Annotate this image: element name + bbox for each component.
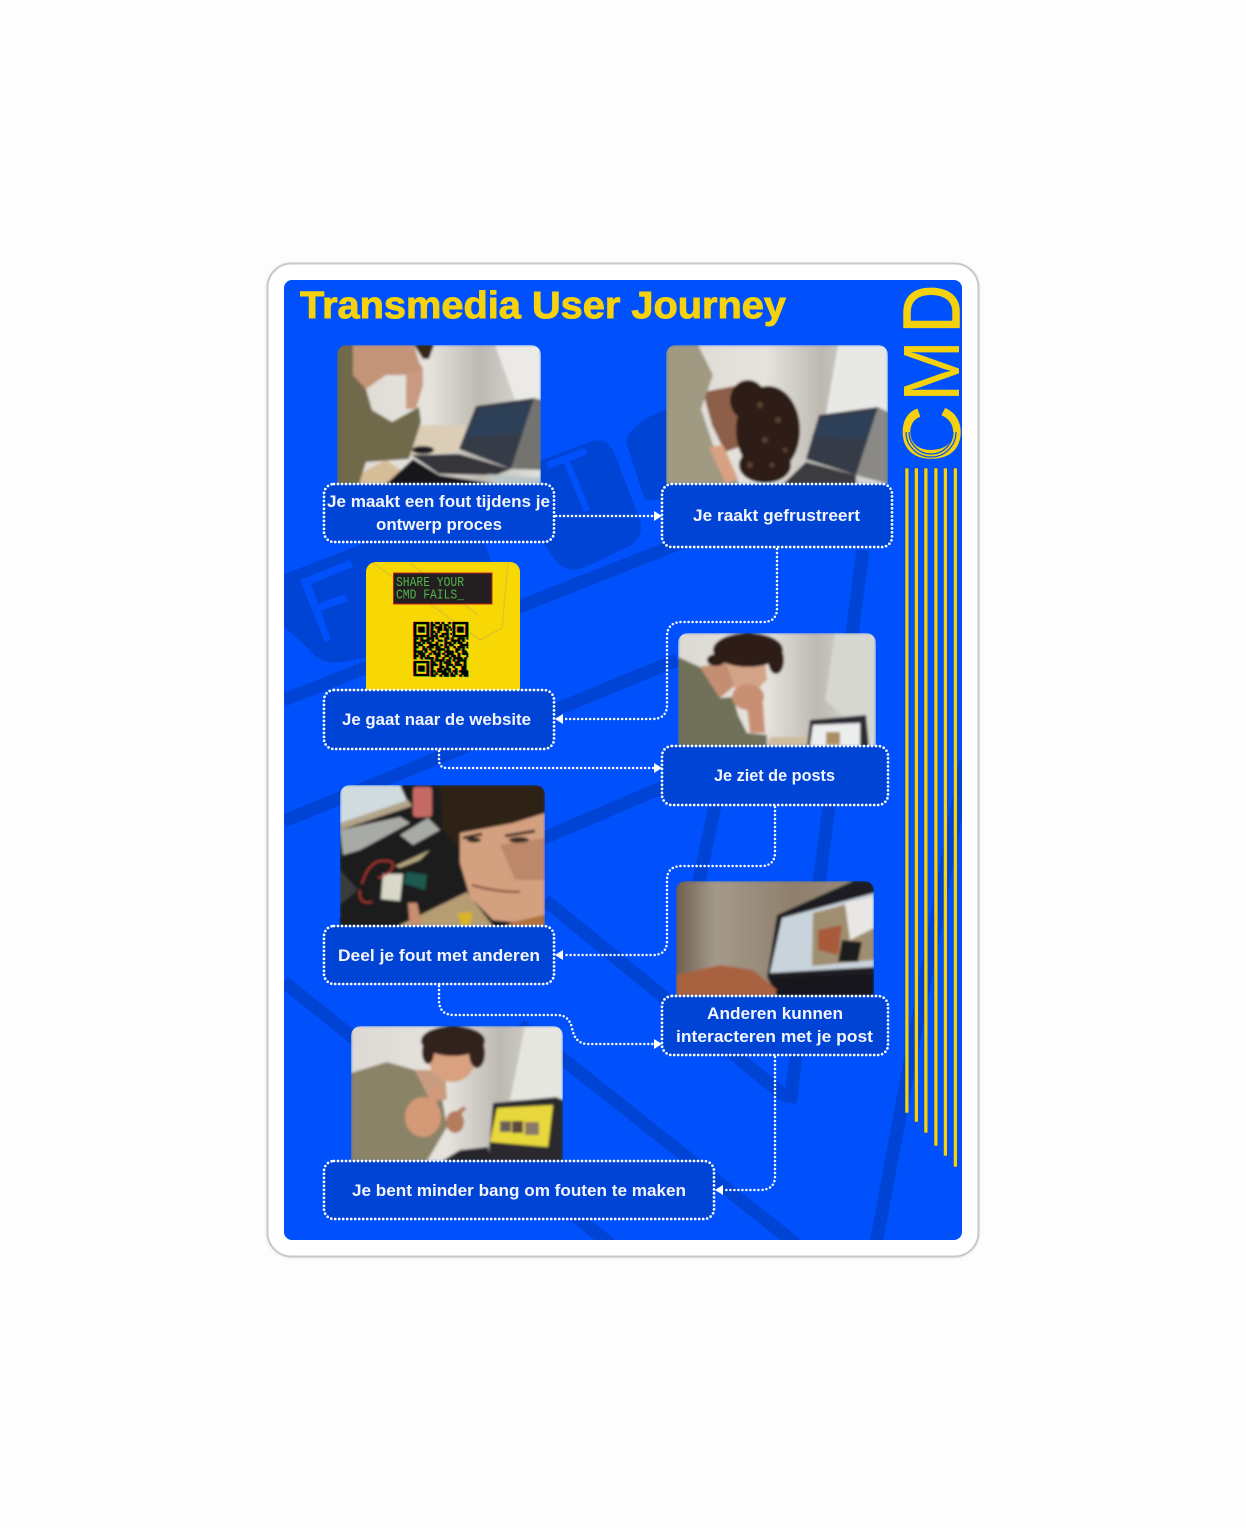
background watermark: diagonal bands and FAIL keys [282,395,966,1244]
photo: laptop screen with post [676,881,874,996]
logo: CMD: D [887,285,976,333]
title: Transmedia User Journey [300,285,786,327]
photo: student reading posts [678,633,876,746]
step: Je ziet de posts [662,746,888,805]
step: Je maakt een fout: Je maakt een fout tijdens je [327,492,550,511]
step: Deel je fout met anderen: Deel je fout met anderen [338,946,540,965]
step: Je bent minder bang [324,1161,714,1219]
connector: gefrustreerd to website [555,549,777,724]
sticker card outline [268,264,978,1257]
step: Je raakt gefrustreert [662,484,892,547]
logo: CMD: C [887,406,976,462]
photo: student with thumbs up [351,1026,563,1161]
connector: interacteren to minder bang [715,1057,775,1195]
panel: blue background [282,280,966,1244]
panel: yellow poster with QR code [366,562,520,690]
photo: student frustrated at laptop [337,345,541,484]
step: Anderen kunnen interacteren: interacteren met je post [676,1027,873,1046]
logo: CMD [887,285,976,462]
step: Anderen kunnen interacteren: Anderen kunnen [707,1004,843,1023]
step: Je maakt een fout: ontwerp proces [376,515,502,534]
connector: delen to interacteren [439,986,662,1049]
step: Je ziet de posts: Je ziet de posts [714,766,835,785]
label: Share your CMD fails: CMD FAILS_ [396,588,464,604]
step: Je gaat naar de website: Je gaat naar de website [342,710,531,729]
logo: CMD: M [887,340,976,402]
step: Je bent minder bang: Je bent minder bang om fouten te maken [352,1181,686,1200]
connector: posts to delen [555,807,775,960]
step: Je raakt gefrustreert: Je raakt gefrustreert [693,506,860,525]
photo: selfie with electronics on table [340,785,545,926]
QR code [413,623,469,676]
connector: fout to gefrustreerd [556,511,662,521]
connector: website to posts [439,751,662,773]
step: Anderen kunnen interacteren [662,996,888,1055]
step: Je maakt een fout [324,484,554,542]
photo: student head down on desk [666,345,888,484]
decorative yellow stripes [905,468,957,1167]
step: Je gaat naar de website [324,690,554,749]
label: Share your CMD fails: SHARE YOUR [396,575,464,591]
step: Deel je fout met anderen [324,926,554,984]
label: Share your CMD fails [394,573,492,604]
